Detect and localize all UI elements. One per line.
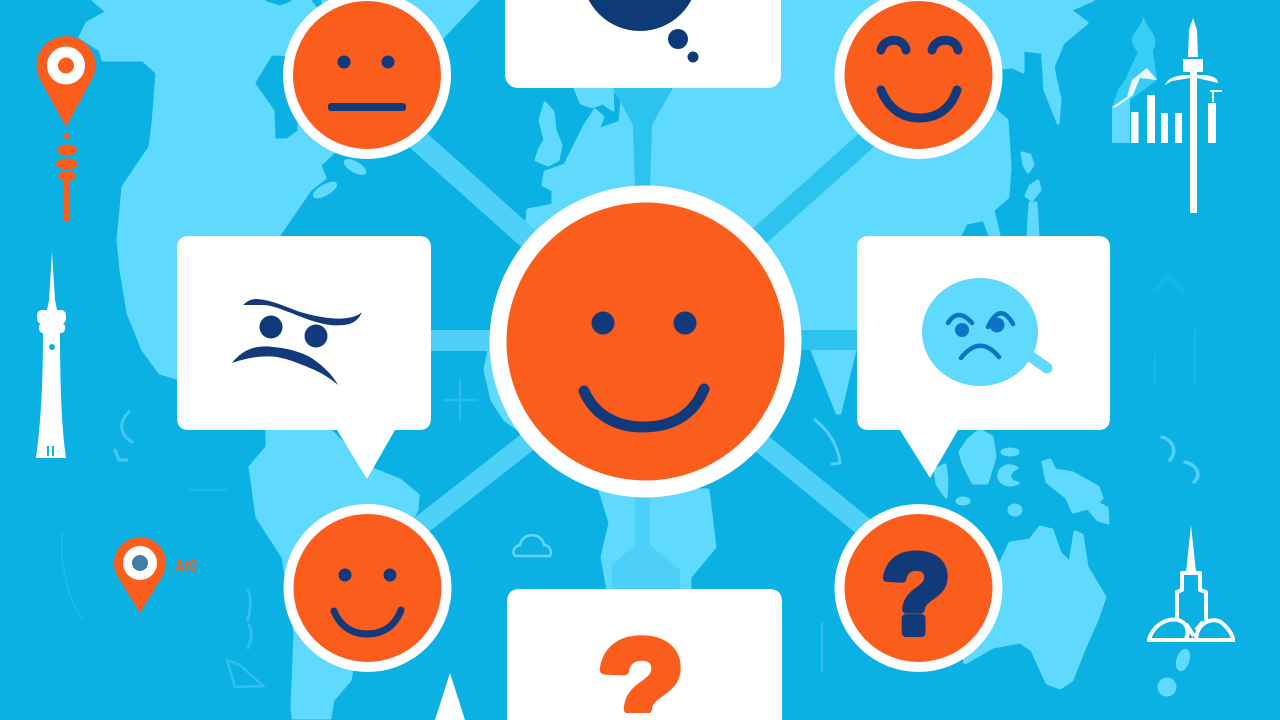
face disc	[840, 0, 998, 154]
face: central smile	[498, 194, 793, 489]
tower head	[37, 310, 66, 324]
bars	[1131, 95, 1216, 143]
decoration: vertical line	[821, 623, 823, 672]
spoke: upper right	[755, 128, 880, 240]
icon: white tower left	[36, 252, 66, 458]
icon: cloud outline	[513, 535, 551, 556]
icon: map pin with stem	[37, 36, 96, 222]
speech bubble: top	[505, 0, 781, 88]
face: lower smile	[288, 509, 446, 667]
face: question	[840, 509, 998, 667]
tower body	[1177, 573, 1206, 620]
icon: skyline bar chart	[1112, 17, 1222, 213]
landmass: central continent	[525, 0, 1093, 345]
spoke: bottom	[612, 490, 680, 590]
bubble body	[505, 0, 781, 88]
landmass: Australia	[960, 527, 1105, 688]
landmass: west continent	[80, 0, 478, 378]
landmass: lower centre lobe	[600, 490, 715, 590]
decoration: arc near right bubble	[815, 420, 840, 464]
mouth	[328, 103, 406, 111]
decoration: dash arrow	[190, 489, 226, 491]
pin label: Ar0	[175, 556, 197, 576]
icon: white spire bottom	[435, 673, 465, 720]
spoke: left	[425, 330, 495, 351]
question mark: ?	[882, 532, 950, 657]
domes and base	[1147, 620, 1235, 640]
eyes	[338, 568, 396, 582]
eyes	[592, 312, 696, 334]
icon: landmark outline	[1147, 525, 1235, 640]
eyes and smile	[881, 40, 958, 118]
icon: lower map pin	[114, 537, 197, 613]
dome building	[1112, 17, 1157, 143]
tower ring	[39, 323, 65, 333]
spoke: top	[613, 88, 673, 190]
decoration: thin arc	[62, 533, 82, 618]
face: neutral	[288, 0, 446, 154]
faint map decorations	[62, 276, 1198, 687]
decoration: crescent marks	[1162, 437, 1198, 482]
speech bubble: bottom	[507, 589, 782, 720]
landmass: small islands	[313, 88, 1191, 695]
roof line	[1112, 68, 1157, 108]
connector spokes	[410, 88, 880, 590]
smile	[334, 610, 401, 634]
pin ring	[128, 550, 152, 576]
spoke: lower right	[760, 442, 880, 540]
face disc	[288, 0, 446, 154]
face disc	[288, 509, 446, 667]
spoke: right	[795, 330, 860, 350]
pin body	[114, 537, 166, 613]
tower door	[48, 446, 53, 456]
bubble body with tail	[177, 236, 431, 479]
small hammer	[1210, 91, 1222, 102]
bubble body with tail	[857, 236, 1110, 478]
bubble body	[507, 589, 782, 720]
spire	[47, 252, 57, 310]
smile	[584, 389, 704, 427]
speech bubble: angry face	[177, 236, 431, 479]
pin stem	[56, 133, 78, 222]
decoration: island marks	[248, 590, 251, 648]
sea: inland bays	[257, 0, 987, 236]
spoke: lower left	[415, 440, 530, 530]
tall tower	[1165, 18, 1218, 213]
worried face icon	[922, 278, 1047, 386]
pin ring	[52, 52, 80, 79]
decoration: plus mark	[445, 380, 477, 420]
face disc	[840, 509, 998, 667]
landmass: New Guinea	[1043, 460, 1108, 523]
decoration: faint right side marks	[1153, 276, 1195, 385]
tower shaft	[36, 333, 66, 458]
eyes	[338, 56, 394, 68]
spire	[1186, 525, 1196, 572]
spoke: upper left	[410, 133, 530, 240]
landmass: Borneo	[960, 430, 995, 483]
face disc	[498, 194, 793, 489]
speech bubble: worried face	[857, 236, 1110, 478]
face: laughing	[840, 0, 998, 154]
decoration: curved marks	[115, 412, 132, 460]
angry face icon	[232, 299, 362, 385]
thought icon	[582, 0, 698, 62]
decoration: shell outline	[227, 660, 263, 687]
dome building base	[1112, 97, 1130, 143]
tower window	[49, 344, 55, 350]
pin body	[37, 36, 96, 127]
landmass: southern continent	[250, 430, 418, 718]
